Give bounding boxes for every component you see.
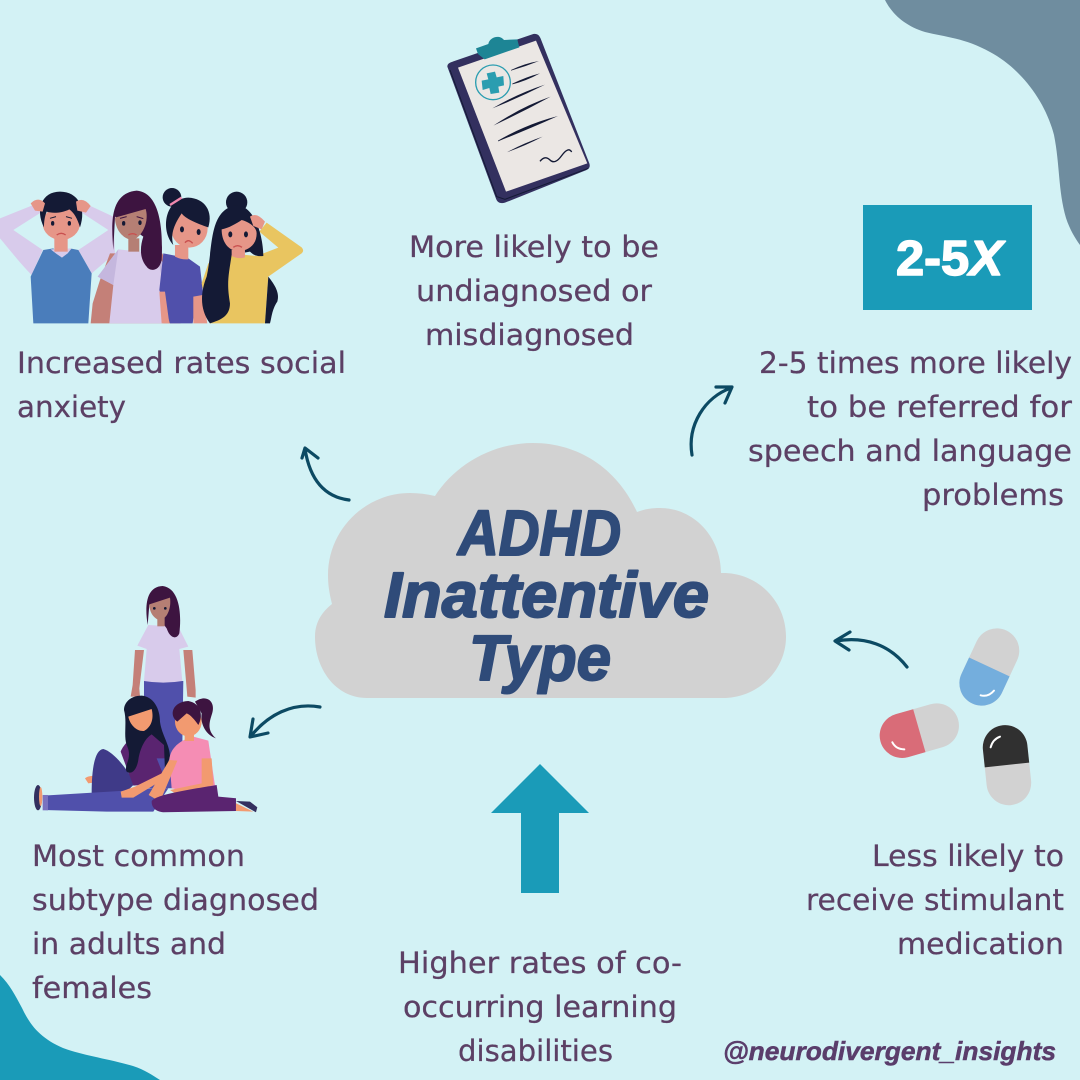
illustration: group of three women [34,586,257,812]
corner blob: bottom left [0,975,160,1080]
central cloud with title [315,443,786,698]
text: most common subtype: in adults and [32,927,226,961]
text: stimulant medication: receive stimulant [806,883,1064,917]
icon: up arrow [491,764,589,893]
badge: 2-5X: 2-5X [896,232,1006,286]
text: social anxiety [17,346,346,424]
black pill [981,723,1033,807]
sitting woman in pink [149,698,257,812]
title [384,497,709,694]
text: learning disabilities: occurring learning [403,990,677,1024]
text: speech referral: to be referred for [807,390,1072,424]
text: stimulant medication: medication [897,927,1064,961]
text: learning disabilities: disabilities [458,1034,613,1068]
red pill [874,698,964,763]
woman with purple hair [91,191,181,323]
text: speech referral: speech and language [748,434,1072,468]
text: speech referral: problems [922,478,1064,512]
title: Inattentive [384,559,709,631]
reclining woman [34,696,170,812]
arrow: to pills [835,632,907,667]
text: social anxiety: anxiety [17,390,126,424]
text: stimulant medication [806,839,1064,961]
illustration: four worried people [0,188,303,323]
title: Type [469,622,611,694]
text: most common subtype: subtype diagnosed [32,883,319,917]
text: undiagnosed [409,230,659,352]
badge: 2-5X [863,205,1032,310]
text: most common subtype [32,839,319,1005]
text: undiagnosed: misdiagnosed [425,318,634,352]
medical cross badge [476,65,510,100]
handle: @neurodivergent_insights [723,1036,1056,1066]
man [0,192,115,323]
text: most common subtype: Most common [32,839,245,873]
standing woman [131,586,196,788]
text: undiagnosed: More likely to be [409,230,659,264]
icon: pills [874,621,1033,807]
text: undiagnosed: undiagnosed or [416,274,652,308]
arrow: to speech referral [691,387,732,455]
text: social anxiety: Increased rates social [17,346,346,380]
title: ADHD [456,497,621,569]
arrow: to sitting group [250,706,320,737]
corner blob: top right [885,0,1080,245]
blue pill [952,621,1027,713]
woman in yellow top [202,192,303,323]
text: speech referral: 2-5 times more likely [759,346,1072,380]
text: most common subtype: females [32,971,152,1005]
signature [540,150,572,162]
text: stimulant medication: Less likely to [872,839,1064,873]
cloud shape [315,443,786,698]
text: learning disabilities: Higher rates of co- [398,946,682,980]
arrow: to social anxiety [302,448,349,500]
text: speech referral [748,346,1072,512]
text: learning disabilities [398,946,682,1068]
icon: clipboard [447,34,590,203]
written lines [492,61,558,152]
woman in blue top [159,188,210,323]
